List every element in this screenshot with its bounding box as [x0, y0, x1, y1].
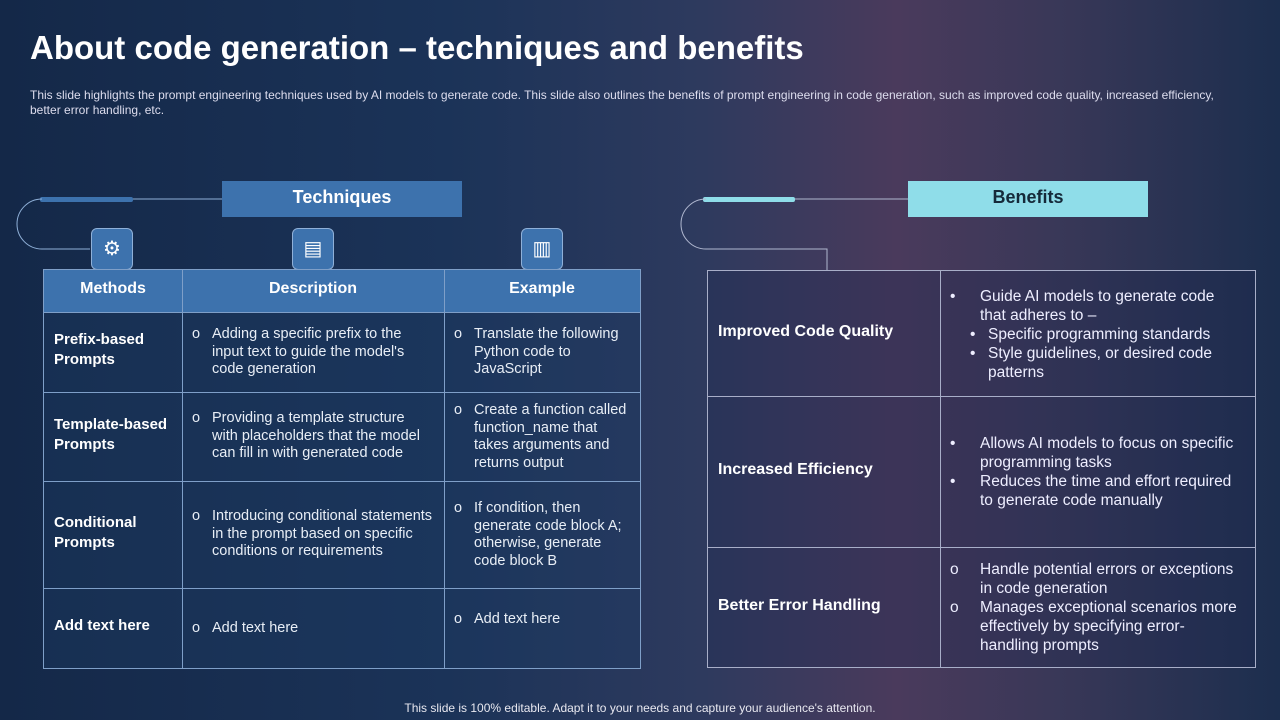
table: techniques: If condition, then generate code block A; otherwise, generate code block B: [474, 500, 622, 568]
icon: methods: [91, 228, 133, 270]
connectors: [16, 197, 908, 270]
row 2: [54, 416, 167, 453]
icon: example: [521, 228, 563, 270]
subtitle: This slide highlights the prompt engineering techniques used by AI models to generate code. This slide also outlines the benefits of prompt engineering in code generation, such as improved code quality, increased efficiency, better error handling, etc.: [30, 88, 1214, 116]
row 1: Prompts: [54, 351, 115, 368]
table: benefits: [707, 270, 1256, 668]
footer: This slide is 100% editable. Adapt it to your needs and capture your audience's attention.: [404, 701, 876, 715]
header cells: Methods: [80, 280, 146, 297]
icon: description: ▤: [304, 238, 322, 260]
row 3: Conditional: [54, 514, 136, 531]
title: About code generation – techniques and benefits: [30, 29, 804, 66]
table: techniques: Adding a specific prefix to the input text to guide the model's code generation: [212, 326, 404, 377]
row 1: [54, 331, 144, 368]
benefit 2: Increased Efficiency: [718, 461, 873, 478]
table: techniques: Add text here: [212, 620, 298, 636]
row 3: [54, 514, 136, 551]
table: benefits: Reduces the time and effort required to generate code manually: [980, 473, 1231, 509]
table: techniques: Translate the following Python code to JavaScript: [474, 326, 619, 377]
table: techniques: Providing a template structure with placeholders that the model can fill in with generated code: [212, 410, 420, 461]
row 1: Prefix-based: [54, 331, 144, 348]
heading: Techniques: Techniques: [293, 187, 391, 207]
row 2: Template-based: [54, 416, 167, 433]
heading: Benefits: Benefits: [992, 187, 1064, 207]
benefit 1: Improved Code Quality: [718, 323, 893, 340]
heading: Techniques: [222, 181, 462, 217]
table: techniques: Create a function called function_name that takes arguments and returns output: [474, 402, 626, 470]
row 4: Add text here: [54, 617, 150, 634]
table: benefits: handling prompts: [980, 637, 1099, 654]
table: benefits: Manages exceptional scenarios more: [980, 599, 1237, 616]
row 3: Prompts: [54, 534, 115, 551]
icon: methods: ⚙: [103, 238, 121, 260]
row 2: Prompts: [54, 436, 115, 453]
icon: description: [292, 228, 334, 270]
heading: Benefits: [908, 181, 1148, 217]
table: techniques: [43, 269, 641, 669]
benefit 3: Better Error Handling: [718, 597, 881, 614]
table: techniques: Add text here: [474, 611, 560, 627]
table: benefits: effectively by specifying error-: [980, 618, 1185, 635]
table: techniques: Introducing conditional statements in the prompt based on specific conditions or requirements: [212, 508, 432, 559]
table: techniques: Example: [509, 280, 575, 297]
table: benefits: Style guidelines, or desired code patterns: [988, 345, 1212, 381]
icon: example: ▥: [533, 238, 551, 260]
table: techniques: Description: [269, 280, 357, 297]
table: benefits: Allows AI models to focus on specific programming tasks: [980, 435, 1233, 471]
table: benefits: Guide AI models to generate code that adheres to –: [980, 288, 1214, 324]
table: benefits: Handle potential errors or exceptions: [980, 561, 1233, 578]
table: benefits: in code generation: [980, 580, 1108, 597]
table: benefits: Specific programming standards: [988, 326, 1210, 343]
